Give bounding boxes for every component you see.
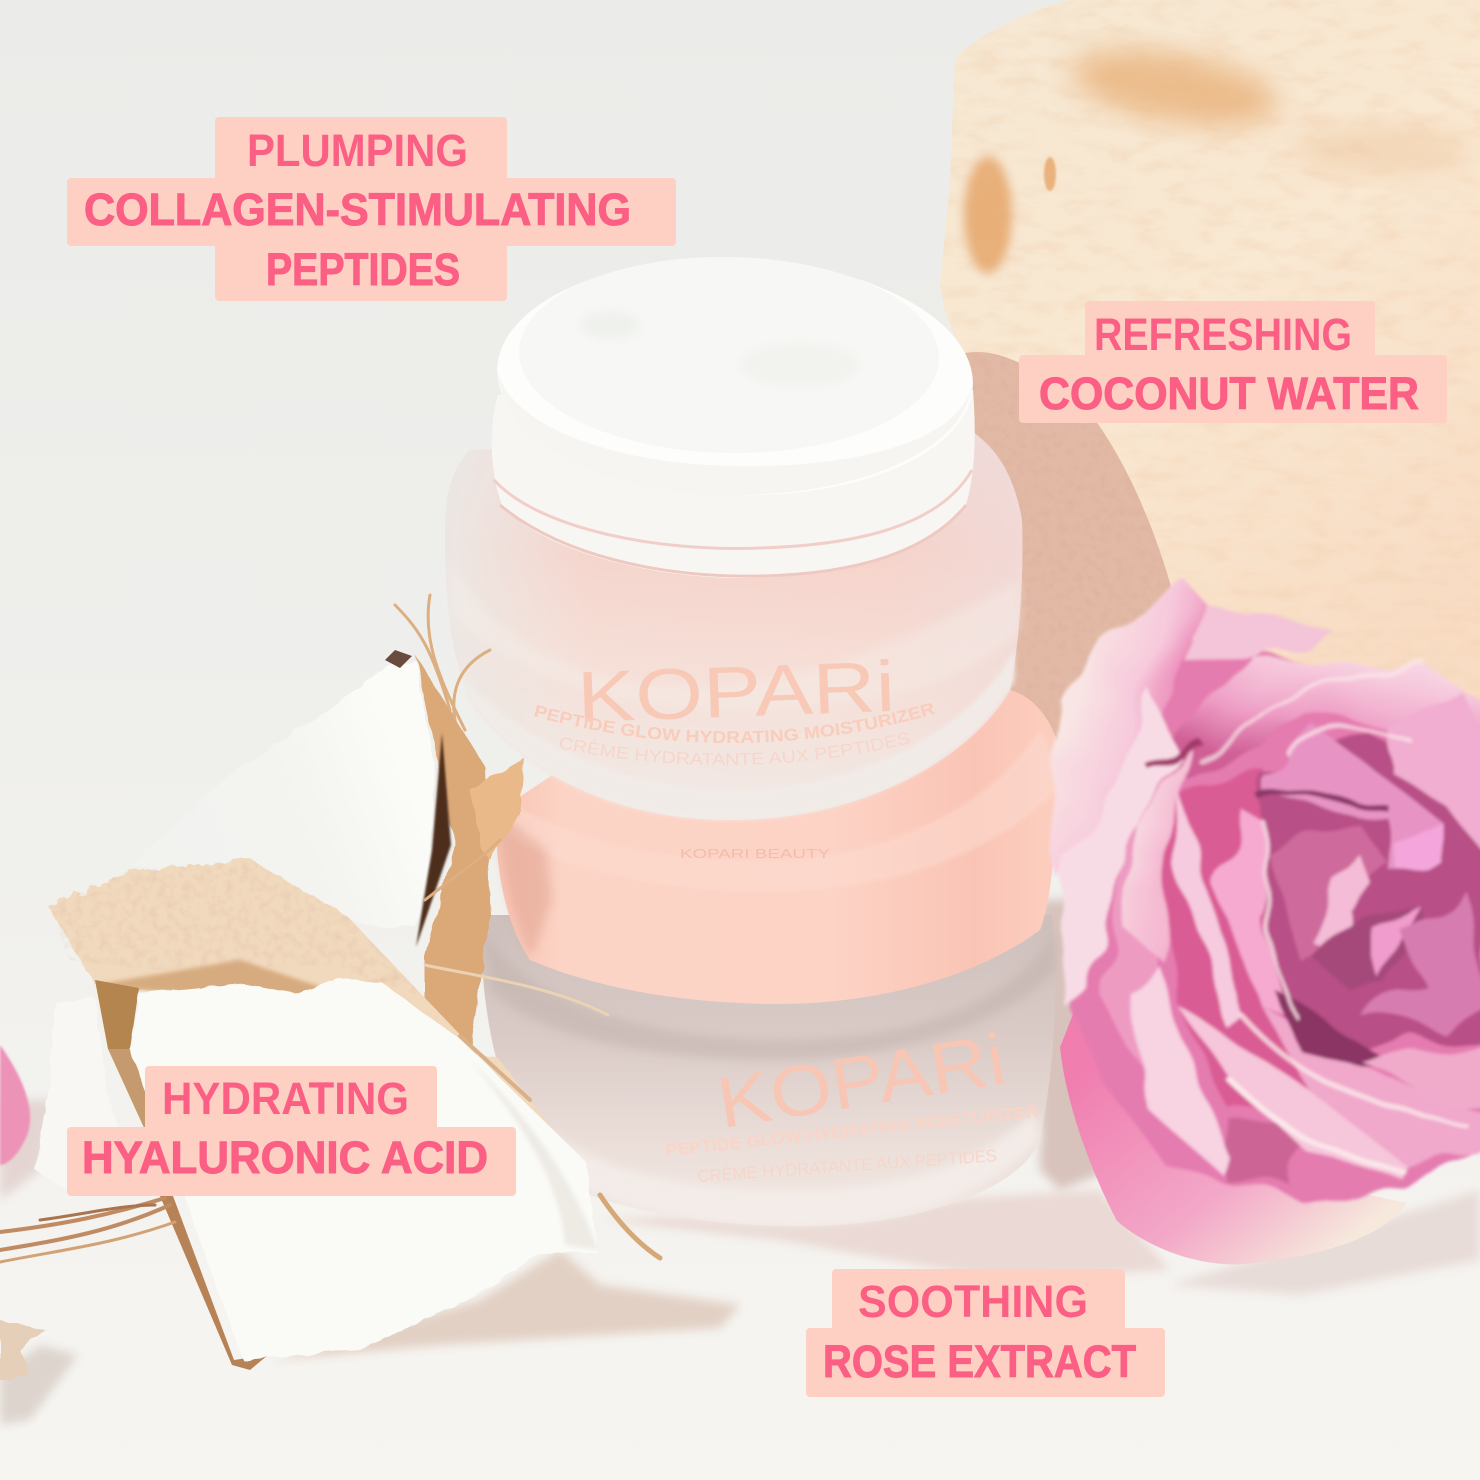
logo: lower jar: KOPARi — [712, 1019, 1011, 1144]
husk brown patch — [95, 980, 139, 1049]
logo: upper jar: KOPARi — [576, 647, 896, 738]
label: refreshing coconut water — [1019, 301, 1447, 423]
label line: hyaluronic acid: HYALURONIC ACID — [82, 1132, 488, 1183]
pink petal edge — [0, 1045, 30, 1165]
whole coconut — [930, 0, 1480, 800]
label line: soothing: SOOTHING — [858, 1276, 1088, 1327]
rose: pale petal 3 — [1133, 960, 1233, 1175]
label line: rose extract: ROSE EXTRACT — [823, 1336, 1136, 1387]
rose: pale petal 2 — [1123, 744, 1193, 955]
coconut husk strip — [416, 656, 490, 1050]
coconut shard: upper flesh — [130, 595, 525, 1050]
rose: centre — [1260, 735, 1480, 1050]
rose: lower sweep petals — [1177, 1005, 1407, 1180]
jar lid rim and cream — [493, 251, 977, 503]
label line: refreshing: REFRESHING — [1094, 309, 1352, 360]
rose: upper sweeping petal — [1150, 656, 1480, 790]
rose: body — [1065, 640, 1480, 1200]
coconut shard: lower husk and flesh — [0, 855, 660, 1370]
rose: outer left petal — [1053, 578, 1203, 881]
main flesh — [130, 978, 598, 1360]
rose: dark creases — [1260, 793, 1390, 810]
rose: left pale petal — [1063, 693, 1180, 1005]
label line: plumping: PLUMPING — [247, 125, 468, 176]
husk fibres — [48, 860, 590, 1180]
jar neck — [492, 390, 975, 578]
label line: hydrating: HYDRATING — [162, 1073, 409, 1124]
product subtitle: upper jar: CRÈME HYDRATANTE AUX PEPTIDES — [560, 732, 910, 765]
rose: pale edge highlights — [1200, 665, 1460, 1172]
product name: lower jar: PEPTIDE GLOW HYDRATING MOISTURIZER — [664, 1102, 1039, 1160]
label line: coconut water: COCONUT WATER — [1039, 368, 1419, 419]
rose: top petal — [1190, 601, 1340, 666]
lid embossed text: KOPARI BEAUTY — [680, 846, 830, 861]
rose: pale strip — [1180, 794, 1240, 1028]
left flesh — [35, 998, 120, 1192]
rose: bottom petal — [1060, 1000, 1407, 1264]
label: hydrating hyaluronic acid — [67, 1066, 516, 1196]
product name: upper jar: PEPTIDE GLOW HYDRATING MOISTURIZER — [534, 704, 936, 743]
rose: deep inner pink — [1155, 770, 1330, 1110]
jar: top — [445, 390, 1023, 822]
label line: peptides: PEPTIDES — [266, 244, 460, 295]
label line: collagen-stimulating: COLLAGEN-STIMULATING — [84, 184, 631, 235]
shadows on table — [0, 900, 1480, 1425]
label: plumping collagen-stimulating peptides — [67, 117, 676, 301]
rose: lit inner strip — [1217, 808, 1293, 1019]
product subtitle: lower jar: CRÈME HYDRATANTE AUX PEPTIDES — [697, 1146, 998, 1186]
jar: bottom — [482, 915, 1056, 1226]
lid: pink — [496, 690, 1058, 1004]
rose — [1053, 578, 1480, 1264]
coconut crumb — [0, 1320, 45, 1380]
label: soothing rose extract — [806, 1269, 1165, 1397]
